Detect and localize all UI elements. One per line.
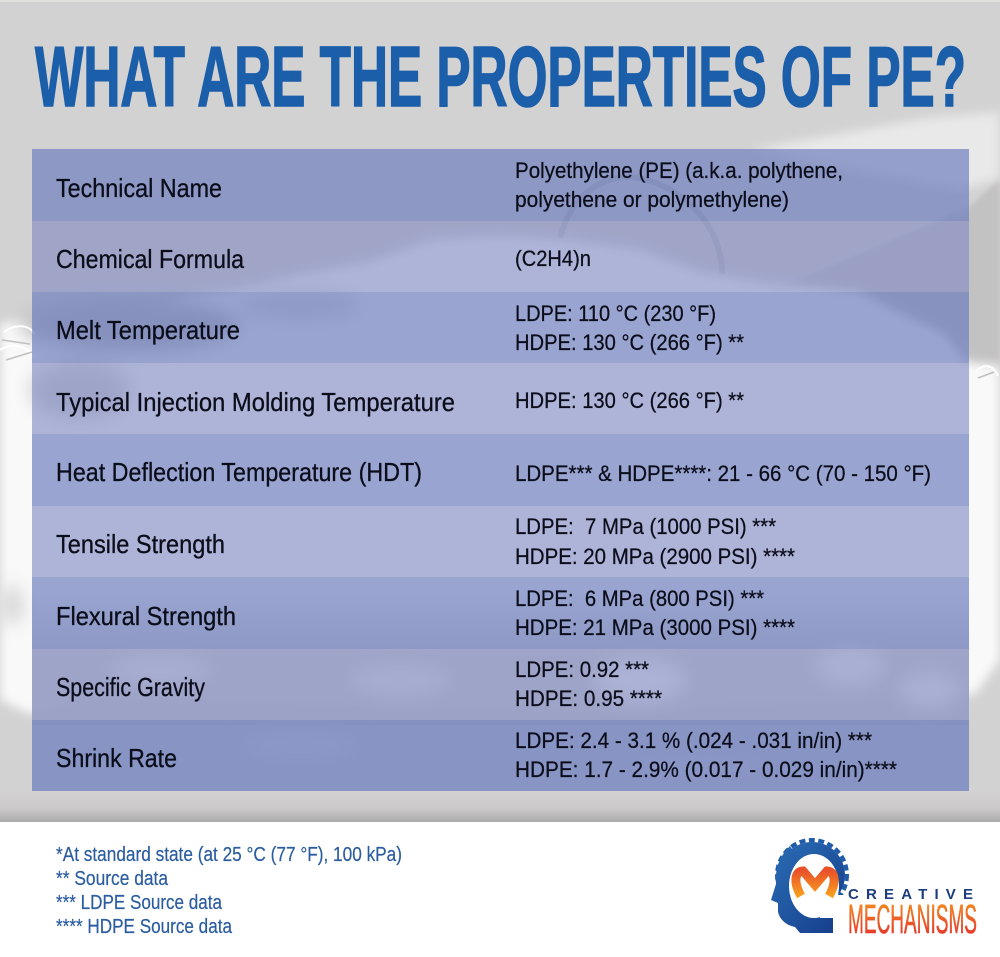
logo wordmark: creative: CREATIVE [848, 886, 973, 903]
row: technical name: Technical Name [56, 173, 222, 203]
row: shrink rate: LDPE: 2.4 - 3.1 % (.024 - .031 in/in) *** [515, 728, 872, 753]
row: tensile strength: Tensile Strength [56, 529, 225, 559]
footnotes: **** HDPE Source data [56, 916, 233, 938]
footnotes: ** Source data [56, 868, 169, 890]
row: heat deflection temperature [32, 434, 969, 506]
row: shrink rate: Shrink Rate [56, 743, 177, 773]
row: chemical formula: (C2H4)n [515, 246, 591, 271]
row: technical name: polyethene or polymethylene) [515, 187, 789, 212]
row: specific gravity: HDPE: 0.95 **** [515, 686, 662, 711]
logo: Creative Mechanisms [771, 840, 977, 942]
row: specific gravity [32, 649, 969, 720]
row: melt temperature: LDPE: 110 °C (230 °F) [515, 301, 716, 326]
row: specific gravity: LDPE: 0.92 *** [515, 657, 649, 682]
row: injection molding temperature [32, 363, 969, 434]
row: specific gravity: Specific Gravity [56, 672, 205, 702]
row: flexural strength: LDPE: 6 MPa (800 PSI) *** [515, 586, 764, 611]
row: heat deflection temperature: Heat Deflection Temperature (HDT) [56, 457, 422, 487]
row: heat deflection temperature: LDPE*** & HDPE****: 21 - 66 °C (70 - 150 °F) [515, 461, 931, 486]
footnotes [56, 844, 402, 938]
row: shrink rate [32, 720, 969, 791]
row: tensile strength [32, 506, 969, 577]
icon: head with gear and M [771, 840, 860, 933]
row: melt temperature [32, 292, 969, 363]
row: technical name [32, 149, 969, 221]
row: melt temperature: HDPE: 130 °C (266 °F) ** [515, 330, 744, 355]
row: tensile strength: HDPE: 20 MPa (2900 PSI) **** [515, 544, 795, 569]
row: chemical formula: Chemical Formula [56, 244, 244, 274]
footer band [0, 792, 1000, 957]
footnotes: *At standard state (at 25 °C (77 °F), 100 kPa) [56, 844, 402, 866]
row: flexural strength: Flexural Strength [56, 601, 236, 631]
row: injection molding temperature: Typical Injection Molding Temperature [56, 387, 455, 417]
row: tensile strength: LDPE: 7 MPa (1000 PSI) *** [515, 514, 776, 539]
properties table [32, 149, 969, 791]
row: melt temperature: Melt Temperature [56, 315, 240, 345]
row: flexural strength [32, 577, 969, 649]
row: shrink rate: HDPE: 1.7 - 2.9% (0.017 - 0.029 in/in)**** [515, 757, 897, 782]
row: flexural strength: HDPE: 21 MPa (3000 PSI) **** [515, 615, 795, 640]
row: technical name: Polyethylene (PE) (a.k.a. polythene, [515, 158, 843, 183]
footnotes: *** LDPE Source data [56, 892, 223, 914]
row: chemical formula [32, 221, 969, 292]
row: injection molding temperature: HDPE: 130 °C (266 °F) ** [515, 388, 744, 413]
